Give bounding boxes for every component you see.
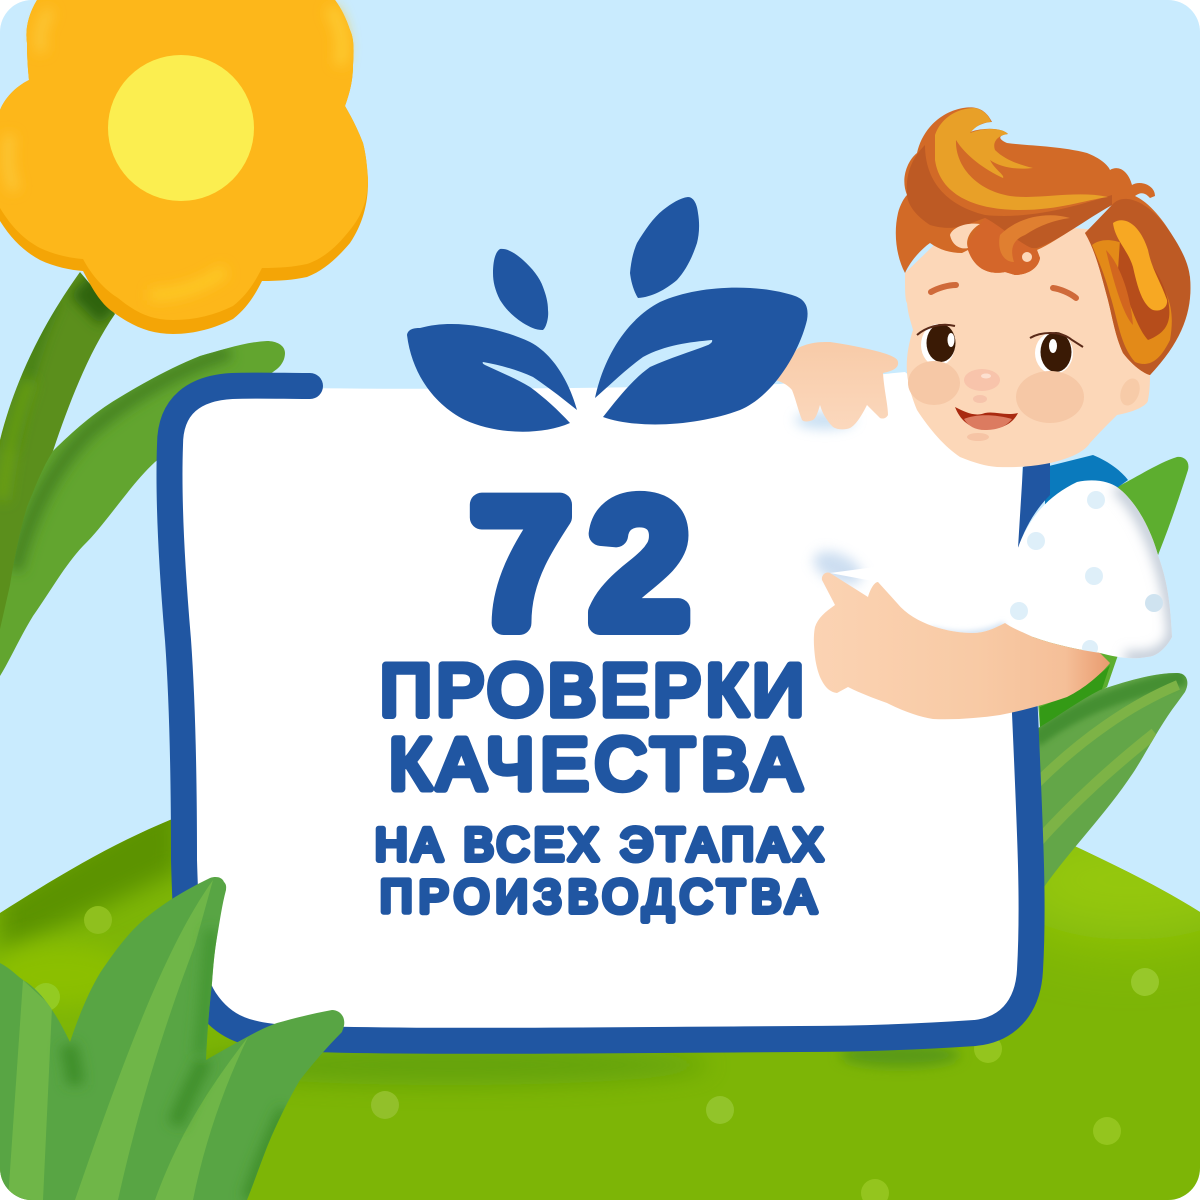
headline: КАЧЕСТВА: КАЧЕСТВА [389, 725, 801, 805]
board [169, 372, 1032, 1041]
grass bottom left [0, 860, 360, 1200]
upper hand [775, 342, 898, 429]
flower stem and leaf [0, 270, 285, 676]
subhead line 2: ПРОИЗВОДСТВА [380, 871, 816, 922]
headline: ПРОВЕРКИ: ПРОВЕРКИ [380, 651, 804, 731]
board blue outline [169, 386, 1032, 1041]
small right leaf [630, 197, 699, 298]
board white panel [169, 372, 1032, 1041]
hair [896, 107, 1191, 375]
eyebrows [931, 285, 1076, 298]
logo: four blue leaves [407, 197, 808, 432]
headline number: 72 [473, 468, 687, 660]
shadow around thumb on board [809, 546, 866, 588]
arm and lower hand [814, 572, 1110, 719]
mouth [955, 407, 1018, 441]
sleeve with dots [830, 480, 1174, 658]
face and ear [905, 220, 1150, 467]
green hill [0, 820, 1200, 1200]
shirt collar strap [1045, 455, 1128, 505]
flower [0, 0, 368, 334]
subhead line 1: НА ВСЕХ ЭТАПАХ [375, 819, 823, 870]
right large leaf [595, 288, 808, 424]
boy character [775, 107, 1191, 719]
ear inner [1120, 378, 1140, 406]
nose [964, 369, 1000, 403]
cheeks [908, 361, 960, 405]
left large leaf [407, 324, 577, 432]
leaves behind board on right [1030, 457, 1195, 895]
eyes [917, 324, 1083, 374]
small left leaf [493, 249, 548, 330]
shadow under fingers [795, 411, 855, 429]
